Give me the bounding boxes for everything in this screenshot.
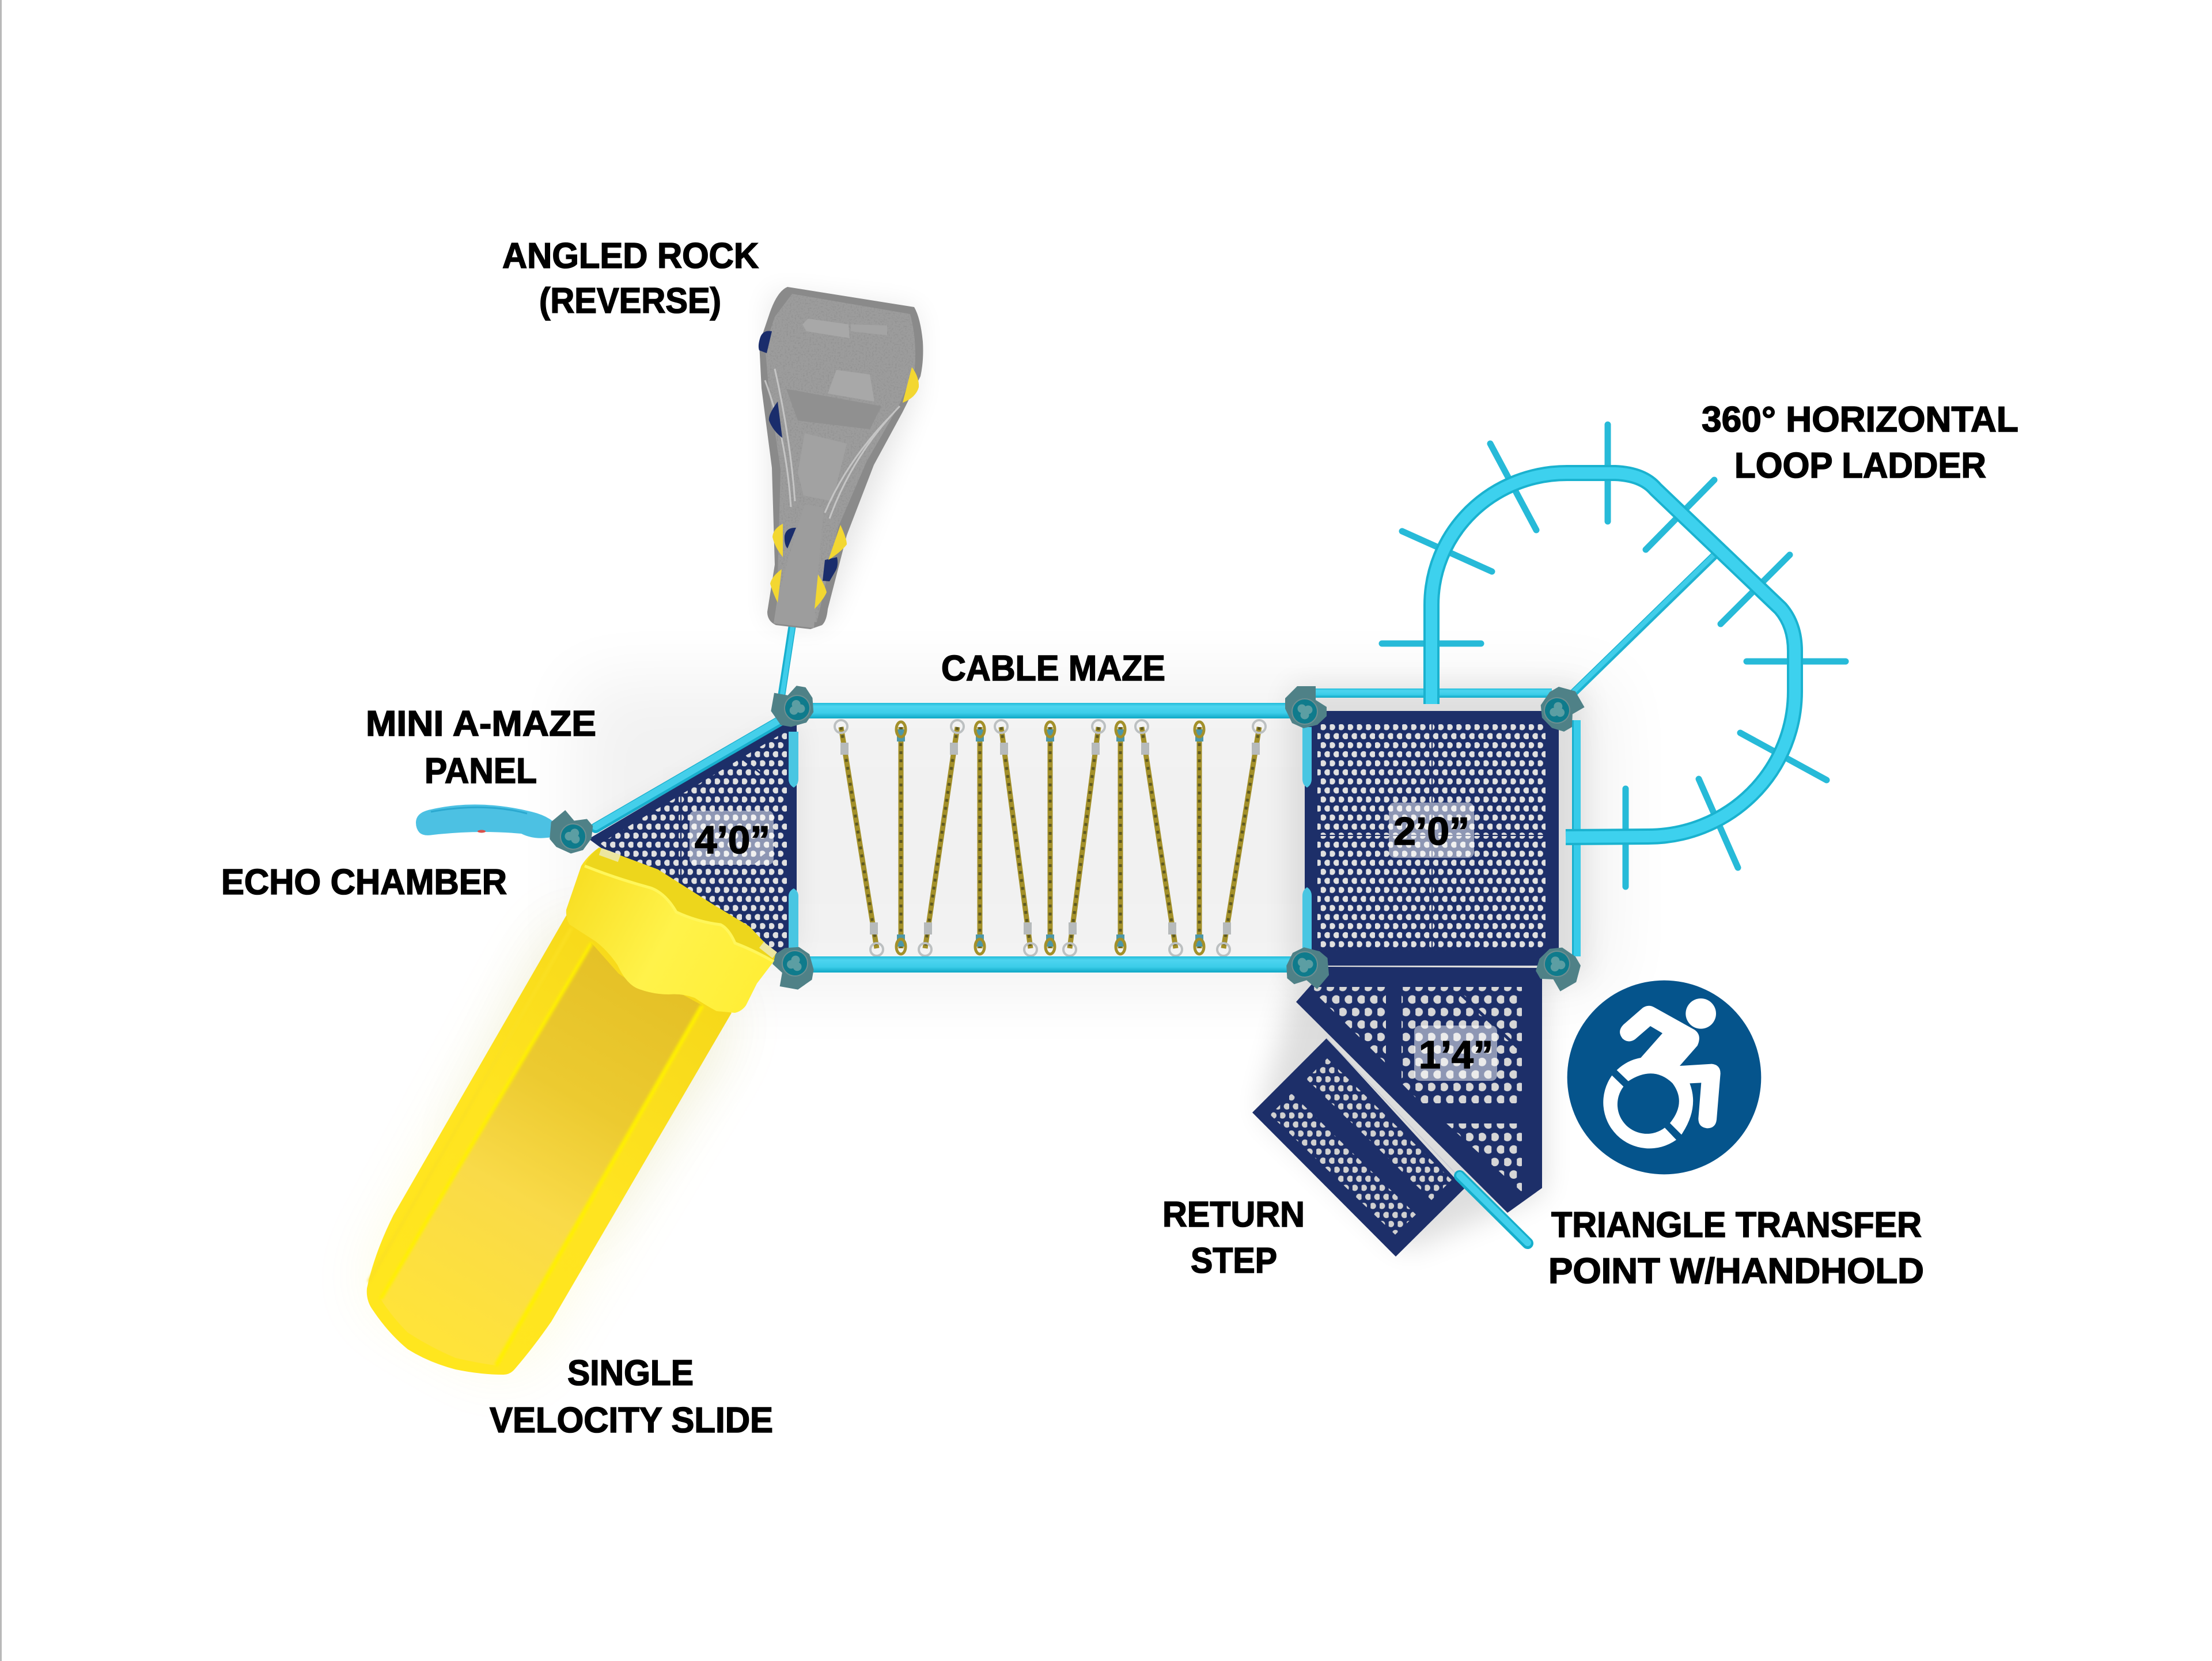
360 horizontal loop ladder [1382,425,1846,887]
slide lip [585,847,775,962]
panel: 4'0" triangular deck [589,716,797,956]
cable rings and sleeves [835,720,1266,956]
handhold [1460,1175,1528,1243]
label: mini a-maze panel: MINI A-MAZE [366,704,596,744]
rock holds [759,331,919,609]
icon: accessible wheelchair symbol [1567,981,1761,1174]
dimension badge: 4'0": 4’0” [695,818,770,862]
echo chamber [416,804,560,838]
angled rock [759,287,923,629]
panel: 2'0" square deck [1305,711,1559,966]
label: mini a-maze panel: PANEL [425,751,537,791]
label: echo chamber: ECHO CHAMBER [221,862,507,902]
ladder rungs [1382,425,1846,887]
label: single velocity slide: VELOCITY SLIDE [490,1401,773,1440]
diagonal rail [596,716,786,828]
label: 360 horizontal loop ladder [1702,400,2018,486]
rock ledges [774,319,887,628]
cable maze [835,720,1266,956]
label: 360 horizontal loop ladder: 360° HORIZONTAL [1702,400,2018,440]
rock support bar [781,627,793,698]
dimension badge: 2'0" [1389,803,1474,858]
label: cable maze: CABLE MAZE [941,649,1165,688]
slide outer shell [367,915,732,1375]
rock body [759,287,923,629]
ladder brace [1568,547,1722,698]
label: single velocity slide [490,1353,773,1440]
label: mini a-maze panel [366,704,596,791]
slide highlights [369,928,702,1365]
label: return step: RETURN [1162,1195,1305,1235]
connectors [542,681,1590,997]
slide head [566,847,775,1013]
label: return step: STEP [1191,1241,1277,1281]
single velocity slide [367,847,775,1375]
dimension badge: 1'4": 1’4” [1419,1033,1493,1077]
label: single velocity slide: SINGLE [567,1353,694,1393]
label: triangle transfer point: TRIANGLE TRANSFER [1551,1205,1922,1245]
label: triangle transfer point: POINT W/HANDHOLD [1548,1251,1924,1291]
ladder tube [1431,473,1795,837]
label: angled rock: (REVERSE) [539,281,721,321]
rock streaks [765,369,900,519]
slide chute [381,943,702,1365]
label: return step [1162,1195,1305,1281]
dimension badge: 2'0": 2’0” [1393,809,1469,853]
label: triangle transfer point [1548,1205,1924,1291]
rock face [765,294,915,622]
label: angled rock: ANGLED ROCK [502,236,759,276]
cable ropes [841,727,1259,948]
panel: return step [1252,1038,1464,1257]
label: angled rock [502,236,759,321]
label: 360 horizontal loop ladder: LOOP LADDER [1734,446,1986,486]
ground shadows [369,294,1613,1371]
frame rails [596,627,1581,973]
panel: triangle transfer point [1296,967,1542,1213]
